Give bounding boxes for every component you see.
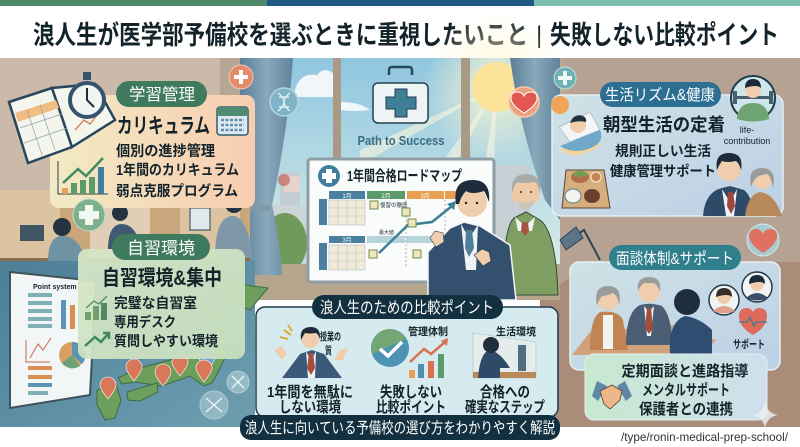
text block: self study list: 専用デスク (114, 314, 176, 330)
text block: no wasted year (267, 383, 353, 416)
icon: heart pulse (739, 308, 767, 335)
illustration: japan map (97, 277, 268, 420)
panel: self study environment (78, 234, 245, 359)
subheading: self study focus: 自習環境&集中 (102, 267, 222, 290)
footer banner: 浪人生に向いている予備校の選び方をわかりやすく解説 (245, 419, 555, 437)
icon: fitness avatar (731, 76, 775, 122)
roadmap table: 3月 (342, 237, 352, 244)
icon: calendar (217, 107, 248, 135)
footer banner (240, 415, 560, 440)
text block: no wasted year: 1年間を無駄に (267, 383, 353, 401)
text block: interview list (622, 362, 748, 418)
subheading: morning lifestyle: 朝型生活の定着 (603, 115, 725, 135)
roadmap table: 1月 (342, 193, 352, 200)
text block: sure steps: 確実なステップ (465, 398, 545, 416)
text block: no wasted year: しない環境 (279, 399, 341, 416)
text block: curriculum list (116, 142, 239, 200)
label: teaching quality: 質 (325, 344, 332, 357)
panel: study desk scene (0, 190, 253, 262)
illustration: young man in suit (428, 180, 516, 300)
icon: avatars (709, 272, 772, 315)
illustration: teacher (274, 325, 348, 378)
label: management system: 管理体制 (408, 325, 448, 338)
icon: first aid kit (373, 67, 428, 123)
curtains (240, 58, 560, 275)
title: 浪人生が医学部予備校を選ぶときに重視したいこと (33, 20, 528, 50)
pill heading: interview (609, 245, 741, 270)
text block: curriculum list: 1年間のカリキュラム (116, 161, 239, 179)
text block: interview list: メンタルサポート (642, 382, 730, 399)
subheading: curriculum: カリキュラム (117, 115, 210, 138)
column: management (371, 325, 448, 416)
illustration: studying student (473, 333, 536, 378)
title: | (536, 22, 542, 49)
heading: roadmap: 1年間合格ロードマップ (347, 167, 462, 185)
text block: self study list: 完璧な自習室 (114, 295, 197, 311)
text block: interview list: 定期面談と進路指導 (622, 362, 748, 380)
pill heading: learning management (116, 81, 207, 107)
pill heading: learning management: 学習管理 (129, 85, 195, 104)
pill heading: interview: 面談体制&サポート (616, 250, 734, 268)
text block: comparison points (376, 383, 446, 416)
text block: sure steps: 合格への (480, 383, 530, 401)
text block: rhythm list (610, 143, 716, 179)
panel: roadmap whiteboard (308, 159, 494, 282)
panel: daily rhythm and health (551, 76, 783, 216)
chart: growth bars (58, 158, 108, 194)
icon: small bar chart (85, 296, 107, 320)
pill heading: self study (112, 234, 210, 260)
pill heading: rhythm: 生活リズム&健康 (605, 86, 715, 104)
url caption: /type/ronin-medical-prep-school/ (621, 430, 789, 444)
icon: desk lamp (560, 227, 600, 260)
panel: interview and support (570, 245, 780, 370)
icon: heart bubble (509, 87, 539, 117)
window scene with sun and clouds (240, 12, 572, 300)
panel: comparison points (256, 295, 558, 417)
text block: curriculum list: 弱点克服プログラム (116, 182, 238, 200)
icon: heart bubble right (747, 224, 779, 256)
caption: life-contribution: contribution (724, 136, 770, 146)
text: path to success: Path to Success (358, 133, 444, 148)
icon: orange plus bubble (229, 65, 253, 89)
pill heading: rhythm (600, 82, 721, 107)
illustration: point system board: Point system (33, 284, 77, 291)
panel: learning management (50, 81, 255, 208)
column: teaching quality (267, 325, 353, 416)
illustration: man and woman (703, 153, 782, 216)
chart: rising bars (409, 338, 448, 378)
top colour stripe (0, 0, 800, 6)
label: teaching quality: 授業の (320, 331, 352, 343)
text block: comparison points: 比較ポイント (376, 398, 446, 416)
roadmap table: 最大値 (379, 229, 394, 236)
illustration: open book planner (9, 72, 115, 163)
text block: sure steps (465, 383, 545, 416)
pill heading: comparison: 浪人生のための比較ポイント (320, 299, 494, 317)
icon: plus badge (318, 165, 340, 187)
icon: sparkle (752, 402, 778, 428)
icons: map pins (100, 349, 215, 399)
icon: trend arrow (85, 333, 109, 346)
roadmap table (319, 191, 463, 270)
text block: self study list (114, 295, 218, 349)
illustration: meeting people (572, 277, 716, 355)
text block: rhythm list: 規則正しい生活 (615, 143, 711, 159)
icon: teal plus bubble (554, 67, 576, 89)
pill heading: comparison (312, 295, 503, 319)
text block: curriculum list: 個別の進捗管理 (116, 142, 215, 160)
text block: interview list: 保護者との連携 (639, 400, 733, 418)
illustration: older man in green sweater (503, 174, 558, 295)
roadmap table: 3月 (420, 193, 430, 200)
caption: life-contribution: life- (740, 125, 754, 135)
icon: stopwatch (70, 72, 104, 117)
label: living environment: 生活環境 (496, 325, 536, 338)
icons: dna bubbles (200, 371, 249, 419)
caption: support: サポート (733, 338, 765, 351)
text block: comparison points: 失敗しない (380, 383, 442, 401)
panel: interview details (585, 354, 778, 428)
column: living environment (465, 325, 545, 416)
icon: green plus bubble (73, 199, 105, 231)
pill heading: self study: 自習環境 (127, 239, 195, 258)
icon: dna bubble (270, 88, 298, 116)
icon: meal tray (562, 170, 610, 208)
icon: sleeping student (551, 96, 601, 155)
text block: self study list: 質問しやすい環境 (114, 333, 218, 349)
icon: check circle (371, 329, 409, 367)
text block: rhythm list: 健康管理サポート (610, 163, 716, 179)
roadmap table: 復習の徹底 (380, 201, 408, 209)
panel: map background (0, 261, 255, 427)
icon: handshake (592, 381, 632, 409)
illustration: point system board (10, 272, 96, 408)
roadmap table: 2月 (381, 193, 391, 200)
